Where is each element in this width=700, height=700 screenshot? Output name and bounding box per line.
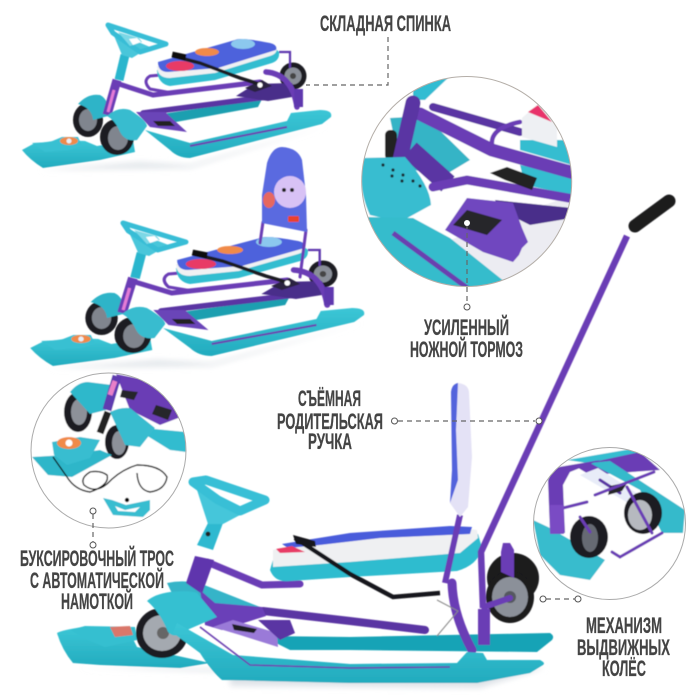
front wheel xyxy=(136,608,188,658)
panel: foot brake detail circle xyxy=(360,70,574,292)
main sled with parent handle xyxy=(57,201,669,688)
callout connector: retractable wheels xyxy=(540,596,581,602)
label: tow rope: НАМОТКОЙ xyxy=(61,589,133,614)
label: folding backrest: СКЛАДНАЯ СПИНКА xyxy=(320,11,451,36)
callout connector: foot brake xyxy=(464,220,470,310)
sled: with raised backrest xyxy=(30,147,364,368)
foot pedal xyxy=(213,620,295,647)
main ski xyxy=(173,623,544,683)
label: foot brake: УСИЛЕННЫЙ xyxy=(424,315,509,340)
backrest, side view xyxy=(445,383,472,583)
label: removable parent handle: СЪЁМНАЯ xyxy=(298,386,361,411)
label: removable parent handle: РУЧКА xyxy=(308,429,352,454)
label: retractable wheels xyxy=(577,613,670,681)
steering wheel xyxy=(193,480,265,524)
label: tow rope xyxy=(20,546,174,614)
label: foot brake xyxy=(410,315,523,362)
parent handle xyxy=(481,201,669,608)
rear frame xyxy=(263,583,510,650)
steering column xyxy=(197,523,223,550)
label: tow rope: С АВТОМАТИЧЕСКОЙ xyxy=(30,568,164,593)
backrest posts xyxy=(260,222,306,277)
front fender xyxy=(147,591,217,636)
seat strap xyxy=(293,535,440,597)
callout connector: tow rope xyxy=(90,508,96,548)
label: tow rope: БУКСИРОВОЧНЫЙ ТРОС xyxy=(20,546,174,571)
label: removable parent handle: РОДИТЕЛЬСКАЯ xyxy=(277,409,383,434)
label: removable parent handle xyxy=(277,386,383,454)
teal under-seat guard xyxy=(167,581,260,625)
frame tubes xyxy=(186,556,300,630)
panel: tow rope detail circle xyxy=(30,372,188,530)
seat xyxy=(270,526,482,581)
label: retractable wheels: КОЛЁС xyxy=(602,656,646,681)
label: foot brake: НОЖНОЙ ТОРМОЗ xyxy=(410,337,523,362)
sled: folded backrest xyxy=(22,25,331,170)
left ski xyxy=(57,626,210,668)
callout connector: folding backrest xyxy=(306,37,388,85)
rear second ski xyxy=(262,633,553,652)
rear wheels xyxy=(486,543,539,623)
callout connector: parent handle xyxy=(392,418,542,424)
panel: retractable wheels detail circle xyxy=(532,446,688,602)
backrest xyxy=(262,147,307,232)
